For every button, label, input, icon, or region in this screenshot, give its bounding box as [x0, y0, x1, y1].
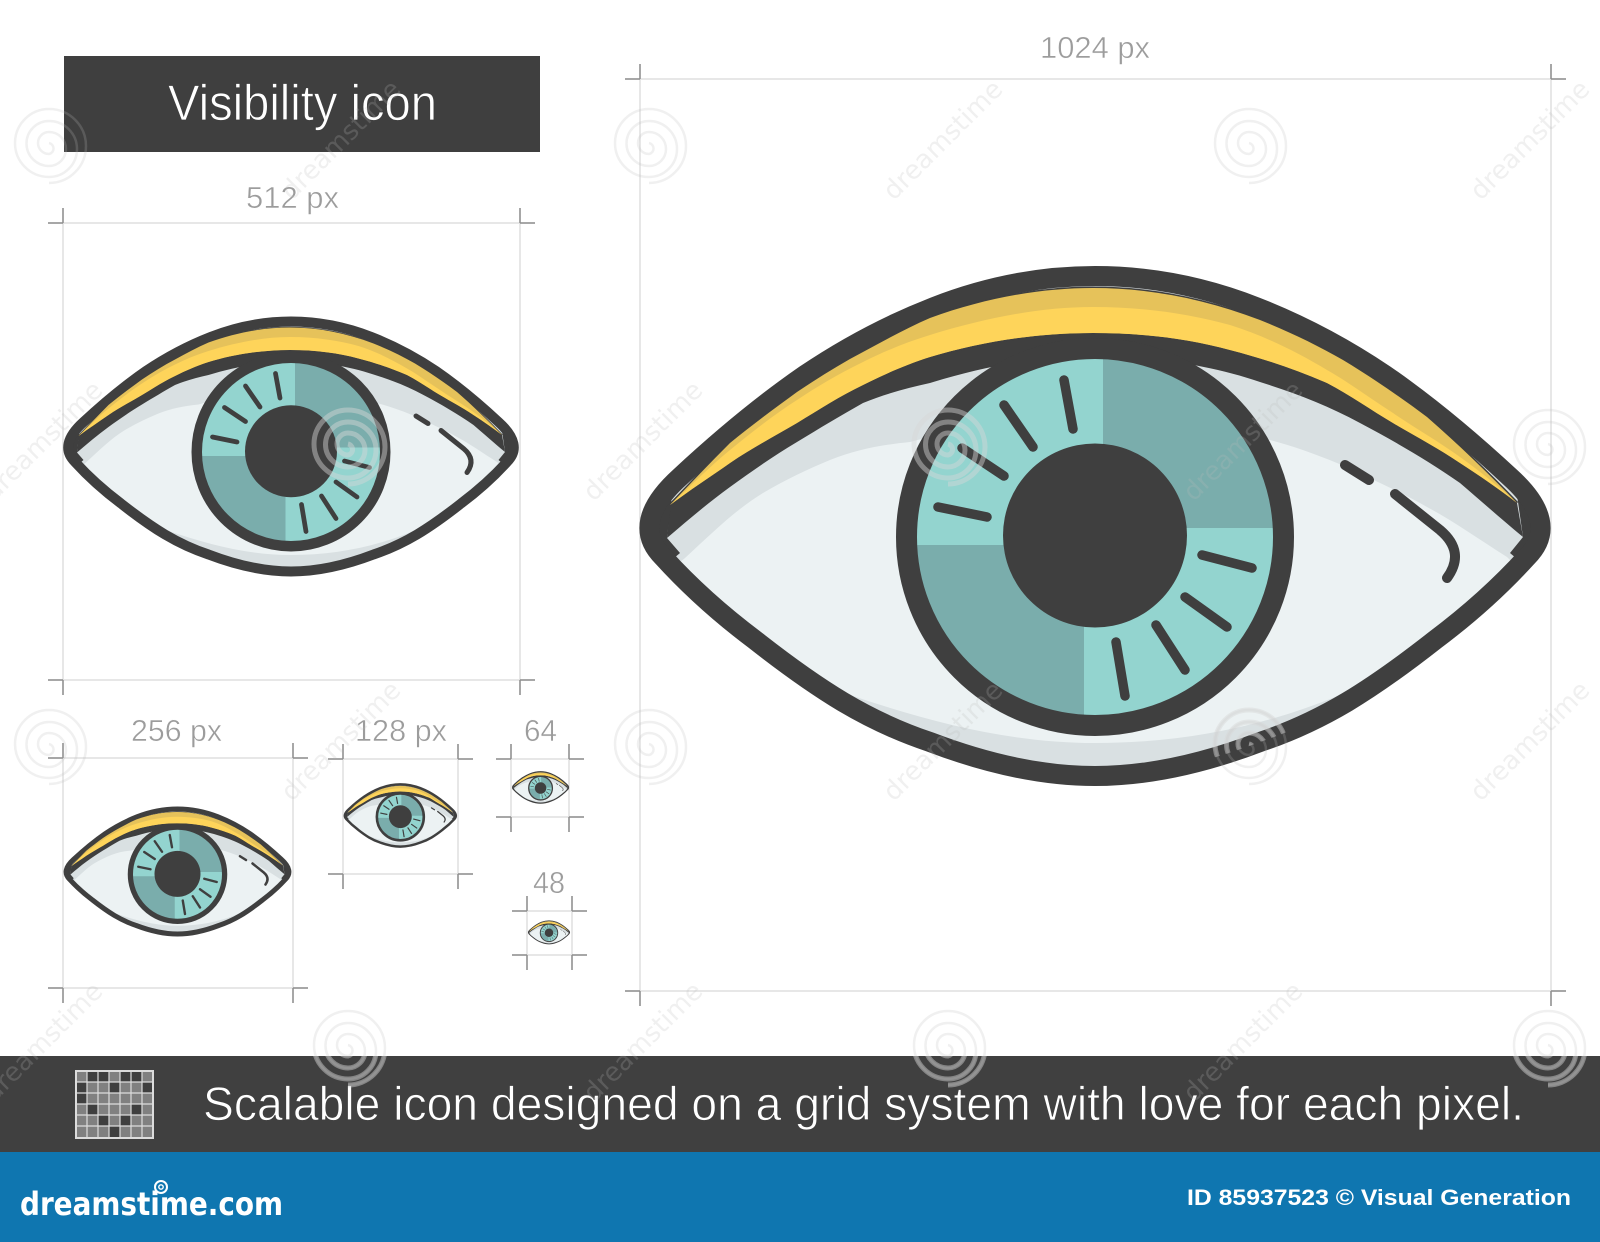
- size guide and eye: 128 px: [328, 713, 473, 889]
- header: Visibility icon: [64, 56, 540, 152]
- size guide and eye: 48 px: 48: [533, 865, 565, 900]
- size guide and eye: 128 px: 128 px: [355, 713, 447, 748]
- eye outline: [649, 276, 1541, 776]
- icon: pixel grid: [76, 1071, 153, 1138]
- header: Visibility icon: Visibility icon: [168, 75, 437, 131]
- watermark: dreamstime: [878, 676, 1009, 807]
- bottom caption bar: [0, 1056, 1600, 1152]
- watermark: dreamstime: [276, 676, 407, 807]
- bottom caption bar: Scalable icon designed on a grid system with love for each pixel.: [203, 1077, 1524, 1130]
- size guide and eye: 512 px: [48, 180, 535, 695]
- image id and author: ID 85937523 © Visual Generation: [1187, 1185, 1571, 1210]
- watermark: dreamstime: [1465, 75, 1596, 206]
- eye highlight: [1345, 465, 1455, 578]
- size guide: 1024 px: 1024 px: [1040, 30, 1150, 65]
- iris: [900, 348, 1293, 735]
- watermark: dreamstime: [276, 75, 407, 206]
- size guide and eye: 256 px: 256 px: [131, 713, 222, 748]
- size guide and eye: 64 px: [496, 713, 584, 832]
- watermark: dreamstime: [1178, 376, 1309, 507]
- dreamstime logo: dreamstime.com: [20, 1185, 283, 1223]
- size guide and eye: 256 px: [48, 713, 308, 1003]
- footer bar: [0, 1152, 1600, 1242]
- size guide and eye: 512 px: 512 px: [246, 180, 339, 215]
- icon: large eye 1024 px: [630, 260, 1560, 790]
- eyeball sclera: [630, 260, 1560, 790]
- watermark: dreamstime: [1465, 676, 1596, 807]
- watermark: dreamstime: [578, 977, 709, 1108]
- size guide and eye: 48 px: [512, 865, 587, 970]
- watermark: dreamstime: [1178, 977, 1309, 1108]
- watermark: dreamstime: [878, 75, 1009, 206]
- size guide and eye: 64 px: 64: [524, 713, 557, 748]
- upper eyelid: [670, 288, 1517, 505]
- watermark: dreamstime: [578, 376, 709, 507]
